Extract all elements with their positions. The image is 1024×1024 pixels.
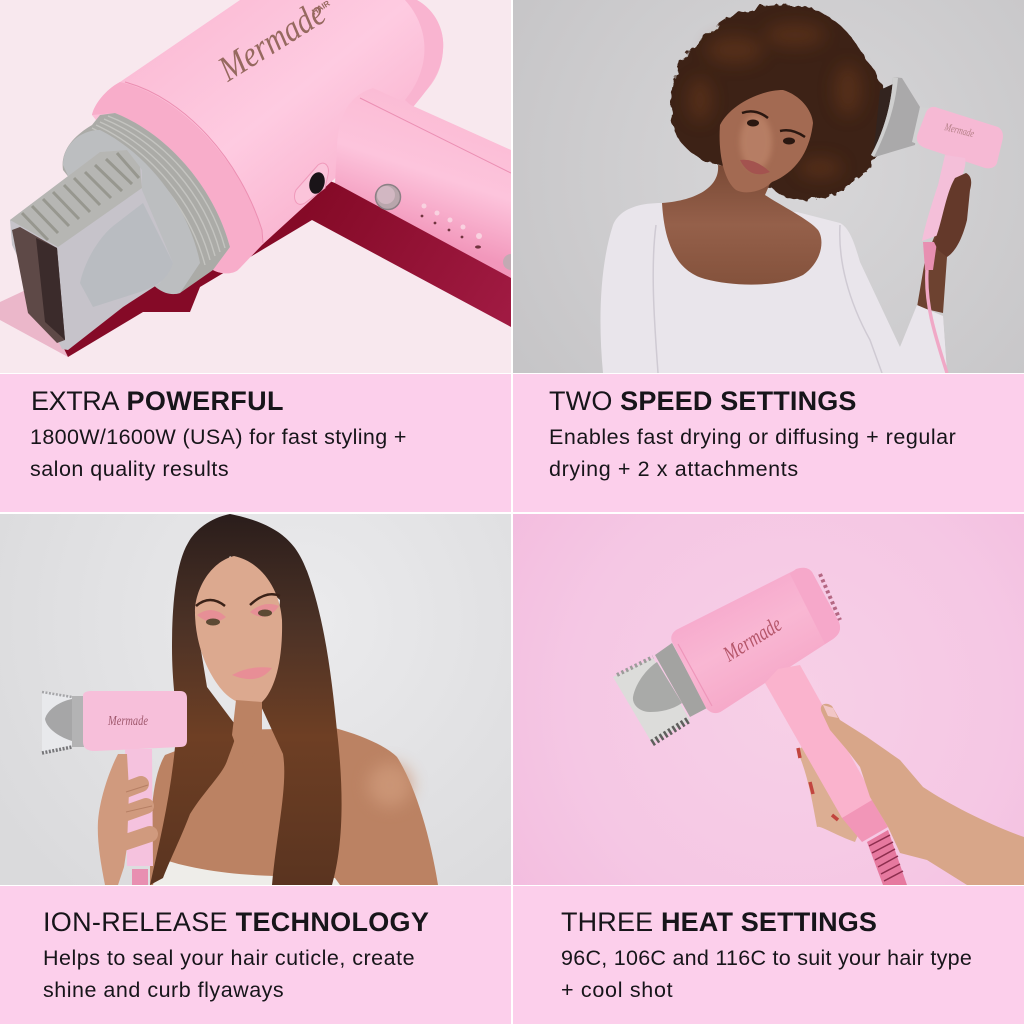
text: two speed settings description: Enables fast drying or diffusing + regular <box>549 425 956 449</box>
shoulders and chest <box>150 728 438 885</box>
grey nozzle attachment <box>10 150 173 350</box>
dryer held up <box>42 691 187 885</box>
heading: extra powerful: EXTRA POWERFUL <box>31 386 284 416</box>
text: extra powerful description <box>30 425 407 481</box>
white strapless top <box>153 862 340 885</box>
panel: extra powerful <box>0 374 511 512</box>
photo: woman with curly hair <box>513 0 1024 373</box>
forearm <box>917 236 948 313</box>
white long sleeve top <box>600 203 900 373</box>
dryer held up: Mermade <box>107 714 148 729</box>
panel: ion-release technology <box>0 886 511 1024</box>
text: three heat settings description <box>561 946 972 1002</box>
dryer with diffuser <box>871 77 1003 373</box>
face <box>720 90 813 192</box>
photo: woman with long straight hair <box>0 514 511 885</box>
heading: two speed settings: TWO SPEED SETTINGS <box>549 386 857 416</box>
heading: ion-release technology: ION-RELEASE TECHNOLOGY <box>43 907 429 937</box>
long hair <box>150 514 342 885</box>
afro hair <box>670 5 887 200</box>
hand gripping handle <box>98 754 152 885</box>
text: extra powerful description: salon quality results <box>30 457 229 481</box>
text: extra powerful description: 1800W/1600W (USA) for fast styling + <box>30 425 407 449</box>
panel: two speed settings <box>513 374 1024 512</box>
dryer handle <box>335 88 519 278</box>
hand and forearm <box>821 704 1024 885</box>
fingers behind handle <box>797 745 860 842</box>
grey ribbed collar <box>63 113 230 294</box>
text: ion-release description: shine and curb flyaways <box>43 978 284 1002</box>
text: three heat settings description: 96C, 106C and 116C to suit your hair type <box>561 946 972 970</box>
heading: three heat settings: THREE HEAT SETTINGS <box>561 907 877 937</box>
dryer body <box>613 568 907 885</box>
neck and chest <box>662 165 821 285</box>
hand gripping handle <box>934 173 971 257</box>
panel: three heat settings <box>513 886 1024 1024</box>
text: three heat settings description: + cool shot <box>561 978 673 1002</box>
cuff of sleeve <box>900 305 946 363</box>
photo: hand holding dryer <box>513 514 1024 885</box>
text: ion-release description: Helps to seal your hair cuticle, create <box>43 946 415 970</box>
text: two speed settings description: drying + 2 x attachments <box>549 457 799 481</box>
photo: dryer close-up <box>0 0 519 373</box>
text: two speed settings description <box>549 425 956 481</box>
dryer with diffuser: Mermade <box>943 121 975 140</box>
text: ion-release description <box>43 946 415 1002</box>
dryer side switch <box>294 163 328 204</box>
face <box>194 556 282 741</box>
dryer body: Mermade <box>718 611 786 667</box>
dryer barrel <box>92 0 443 273</box>
